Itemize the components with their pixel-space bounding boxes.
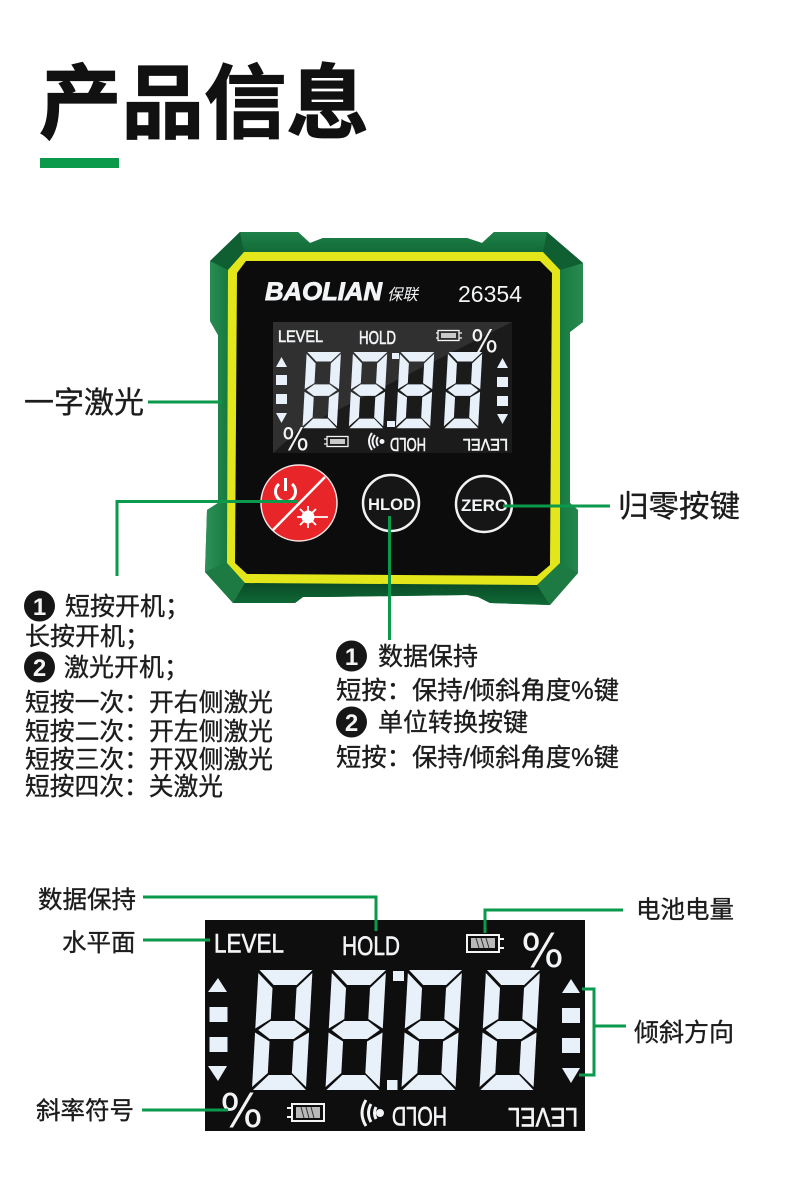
callout: line laser: 一字激光 — [24, 387, 144, 420]
title accent bar — [40, 158, 119, 168]
text block: power button instructions: 短按一次：开右侧激光 — [25, 689, 273, 717]
badge 2: 2 — [345, 710, 358, 737]
callout: horizontal plane: 水平面 — [62, 929, 136, 957]
callout: tilt direction: 倾斜方向 — [634, 1019, 734, 1047]
callout: battery level: 电池电量 — [636, 896, 734, 924]
ZERO button — [456, 476, 512, 532]
HOLD button — [363, 475, 419, 531]
badge 1 — [24, 590, 55, 622]
text block: power button instructions — [24, 590, 273, 801]
badge 1: 1 — [33, 594, 46, 621]
callout: zero button: 归零按键 — [618, 490, 740, 524]
product: device — [205, 232, 583, 605]
LCD bottom mirrored labels — [220, 1084, 578, 1138]
callout: slope symbol: 斜率符号 — [36, 1097, 134, 1125]
device LCD top labels: LEVEL — [278, 327, 323, 346]
callout: battery level — [485, 896, 734, 933]
device LCD bottom mirrored labels: HOLD — [390, 434, 426, 454]
yellow frame — [227, 252, 560, 585]
badge 1 — [336, 640, 367, 672]
LCD top labels: HOLD — [342, 931, 400, 961]
device LCD top labels: % — [471, 324, 498, 360]
device LCD battery — [436, 330, 462, 340]
ZERO button: ZERO — [461, 497, 508, 515]
power and laser button — [261, 465, 337, 541]
text block: hold button instructions — [336, 640, 619, 772]
LCD bottom mirrored labels: HOLD — [392, 1101, 447, 1131]
text block: power button instructions: 激光开机； — [64, 654, 189, 682]
text block: hold button instructions: 数据保持 — [378, 643, 478, 671]
device LCD bottom mirrored labels — [282, 422, 508, 458]
callout: data hold: 数据保持 — [38, 886, 136, 914]
LCD bottom mirrored labels: LEVEL — [508, 1102, 578, 1132]
device LCD tilt indicators — [276, 357, 508, 424]
callout line: power button — [117, 502, 297, 576]
text block: power button instructions: 短按开机； — [65, 593, 190, 621]
LCD top labels — [214, 924, 564, 978]
callout: tilt direction — [579, 989, 734, 1075]
brand logo: BAOLIAN — [265, 278, 383, 306]
icon: battery — [467, 935, 504, 952]
text block: hold button instructions: 单位转换按键 — [378, 709, 528, 737]
text block: power button instructions: 短按四次：关激光 — [25, 773, 223, 801]
device LCD digits — [302, 352, 482, 428]
text block: hold button instructions: 短按：保持/倾斜角度%键 — [336, 744, 619, 772]
model number: 26354 — [458, 281, 522, 307]
device LCD bottom mirrored labels: % — [282, 422, 309, 458]
black face — [235, 261, 552, 576]
text block: power button instructions: 长按开机； — [25, 623, 150, 651]
badge 2 — [24, 652, 55, 682]
device green body — [205, 232, 583, 605]
text block: hold button instructions: 短按：保持/倾斜角度%键 — [336, 677, 619, 705]
LCD bottom mirrored labels: % — [220, 1084, 263, 1138]
device LCD top labels: HOLD — [359, 328, 396, 348]
tilt indicators — [208, 978, 580, 1083]
LCD top labels: LEVEL — [214, 928, 284, 958]
LCD top labels: % — [521, 924, 564, 978]
text block: power button instructions: 短按三次：开双侧激光 — [25, 746, 273, 774]
HOLD button: HLOD — [368, 496, 415, 514]
callout line: hold button — [388, 516, 391, 640]
device LCD top labels — [278, 324, 498, 360]
device LCD bottom mirrored labels: LEVEL — [463, 435, 508, 454]
callout: data hold — [38, 886, 376, 931]
panel: enlarged LCD — [205, 920, 585, 1138]
brand logo: 保联 — [387, 286, 420, 304]
text block: power button instructions: 短按二次：开左侧激光 — [25, 718, 273, 746]
LCD digits — [252, 970, 540, 1090]
device LCD screen — [273, 322, 512, 458]
badge 1: 1 — [345, 644, 358, 671]
badge 2 — [336, 706, 367, 738]
badge 2: 2 — [33, 655, 46, 682]
title: 产品信息 — [39, 60, 369, 150]
